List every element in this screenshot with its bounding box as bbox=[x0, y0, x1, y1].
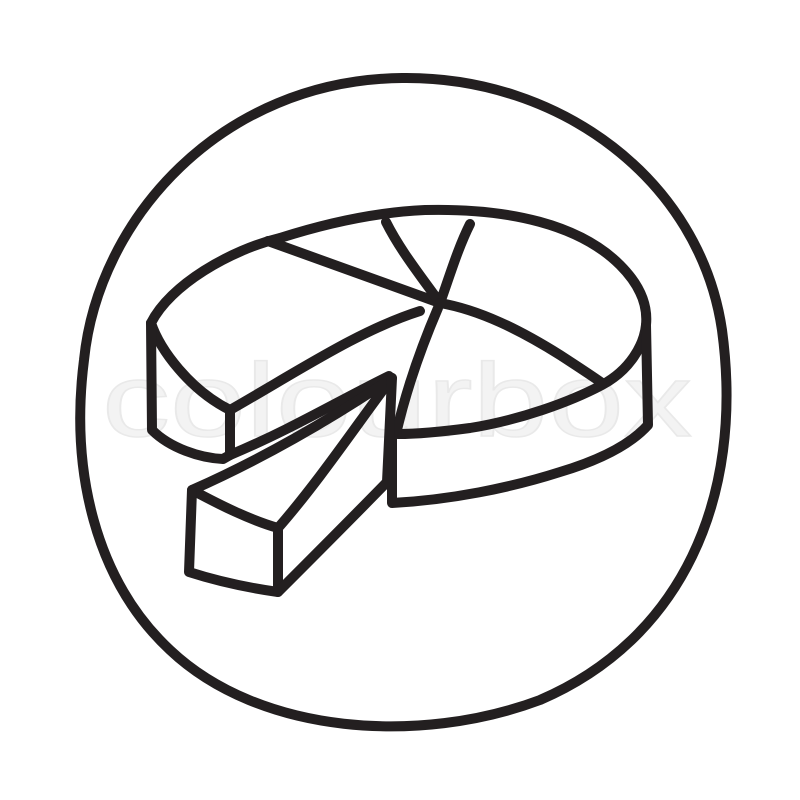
wedge top face bbox=[192, 378, 392, 528]
pie top ellipse outline bbox=[151, 210, 646, 434]
slice lines bbox=[268, 241, 440, 303]
pie right side band bbox=[392, 325, 648, 503]
outer circle bbox=[80, 78, 727, 726]
pie graphic bbox=[151, 210, 648, 592]
watermark text: colourbox bbox=[102, 343, 692, 459]
wedge front face bbox=[189, 490, 278, 592]
left block cut bbox=[151, 311, 420, 410]
wedge piece bbox=[189, 378, 392, 592]
wedge right face bbox=[278, 378, 392, 592]
